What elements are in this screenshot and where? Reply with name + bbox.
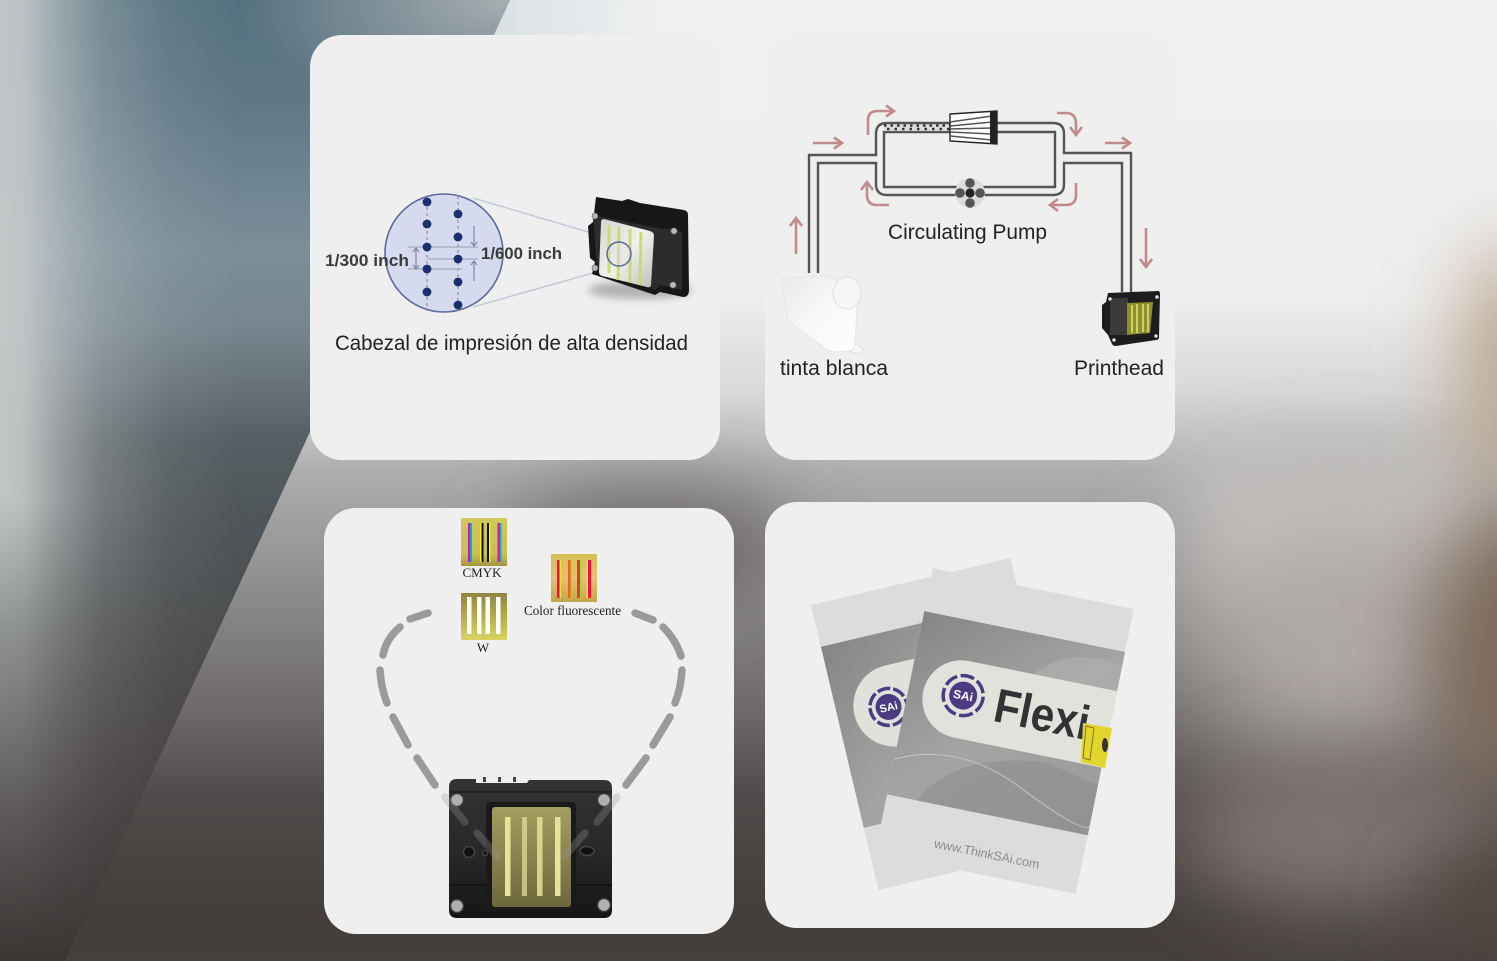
- brochure: front: [881, 568, 1134, 894]
- caption: high density: Cabezal de impresión de alta densidad: [335, 331, 688, 355]
- icon: white channels: [461, 593, 507, 640]
- ink pipes: [809, 123, 1131, 292]
- label: 1/600 inch: 1/600 inch: [481, 244, 562, 263]
- panel: ink channel configuration: [324, 508, 734, 934]
- card: software: [765, 502, 1175, 928]
- zoom lines: [473, 198, 593, 307]
- brochure: back: [811, 558, 1017, 890]
- yellow badge: [1081, 723, 1112, 768]
- icon: white ink bottle: [781, 276, 863, 354]
- brochure: back: SAi: [878, 700, 899, 716]
- panel: Flexi software: [765, 502, 1183, 928]
- dashed link: right: [626, 613, 682, 785]
- label: 1/300 inch: 1/300 inch: [325, 251, 409, 270]
- nozzle magnifier diagram: [385, 194, 503, 312]
- label: circulating pump: Circulating Pump: [888, 220, 1047, 244]
- label: fluorescent colour: Color fluorescente: [524, 604, 621, 619]
- flow arrows: [790, 106, 1152, 267]
- card: circulation: [765, 35, 1175, 460]
- icon: large printhead: [445, 777, 617, 918]
- dashed link: left: [380, 613, 435, 785]
- card: high density: [310, 35, 720, 460]
- brochure: front: Flexi: [990, 680, 1094, 751]
- brochure URL: www.ThinkSAi.com: [932, 836, 1041, 872]
- circulating pump icon: [955, 178, 985, 208]
- panel: circulating pump: [765, 35, 1175, 460]
- icon: fluorescent channels: [551, 554, 597, 602]
- printhead photo: [588, 197, 692, 299]
- icon: small printhead: [1102, 291, 1160, 346]
- label: CMYK: CMYK: [462, 565, 502, 580]
- panel: high density printhead: [310, 35, 720, 460]
- ink filter: [884, 111, 997, 144]
- card: ink channels: [324, 508, 734, 934]
- label: printhead: Printhead: [1074, 356, 1164, 380]
- icon: CMYK channels: [461, 518, 507, 566]
- label: W: W: [477, 640, 490, 655]
- label: white ink: tinta blanca: [780, 356, 888, 380]
- brochure: front: SAi: [952, 687, 974, 704]
